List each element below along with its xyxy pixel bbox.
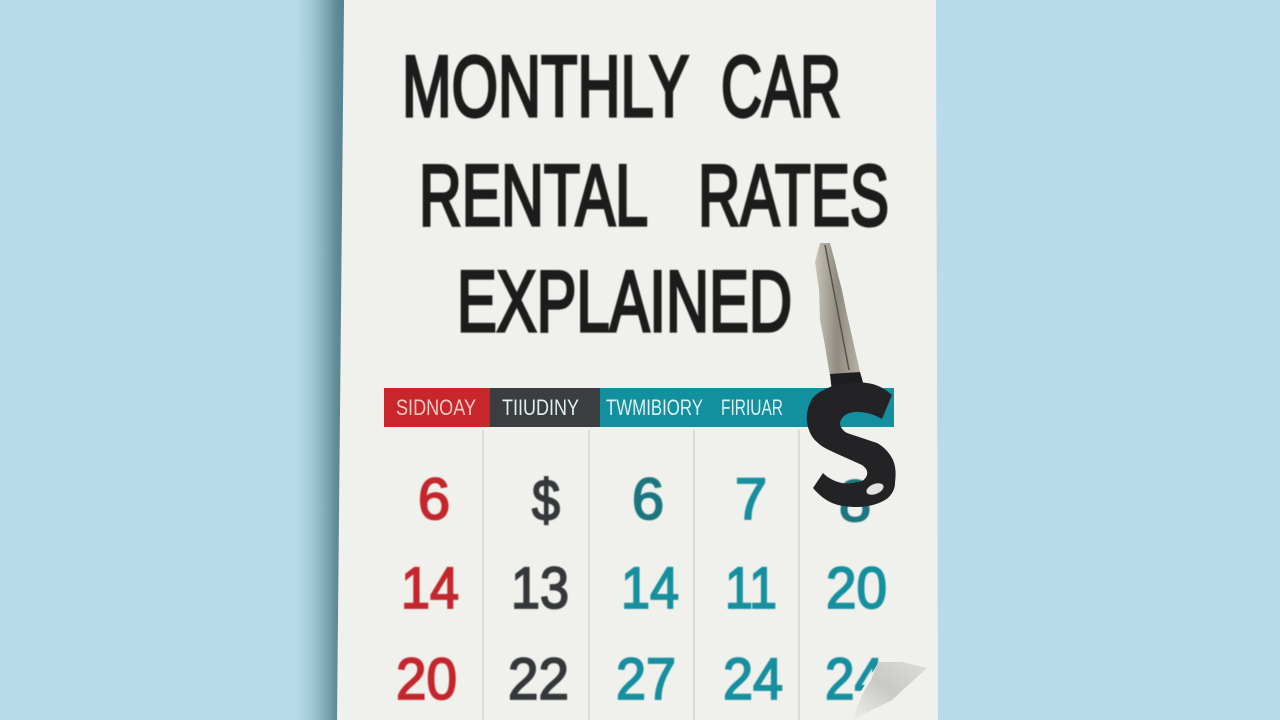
calendar numbers: 11 bbox=[725, 556, 777, 621]
title: RENTAL bbox=[419, 148, 648, 244]
page curl bbox=[852, 660, 927, 720]
title bbox=[402, 39, 889, 350]
calendar numbers: $ bbox=[532, 468, 560, 533]
calendar numbers: 6 bbox=[632, 467, 664, 532]
title: RATES bbox=[698, 148, 889, 244]
weekday header bar: TIIUDINY bbox=[502, 395, 579, 420]
title: EXPLAINED bbox=[457, 254, 792, 350]
calendar numbers: 7 bbox=[735, 467, 767, 532]
icon: car key with dollar sign bow bbox=[807, 243, 896, 507]
calendar numbers: 8 bbox=[839, 469, 871, 534]
weekday header bar: FIRIUAR bbox=[721, 395, 783, 420]
calendar numbers: 20 bbox=[826, 556, 887, 621]
weekday header bar: SIDNOAY bbox=[396, 395, 476, 420]
calendar page bbox=[337, 0, 938, 720]
calendar numbers: 24 bbox=[723, 647, 783, 712]
calendar numbers: 14 bbox=[401, 556, 459, 621]
calendar numbers: 20 bbox=[396, 647, 457, 712]
calendar numbers: 27 bbox=[616, 647, 676, 712]
calendar numbers: 6 bbox=[418, 467, 450, 532]
paper shadow bbox=[290, 0, 345, 720]
title: MONTHLY bbox=[402, 39, 689, 135]
calendar numbers bbox=[396, 467, 887, 712]
weekday header bar: TWMIBIORY bbox=[606, 395, 703, 420]
calendar numbers: 22 bbox=[508, 647, 569, 712]
title: CAR bbox=[721, 39, 841, 135]
weekday header bar bbox=[384, 388, 894, 427]
calendar numbers: 14 bbox=[621, 556, 679, 621]
calendar numbers: 24 bbox=[825, 647, 884, 712]
column dividers bbox=[483, 430, 799, 720]
calendar numbers: 13 bbox=[511, 556, 569, 621]
